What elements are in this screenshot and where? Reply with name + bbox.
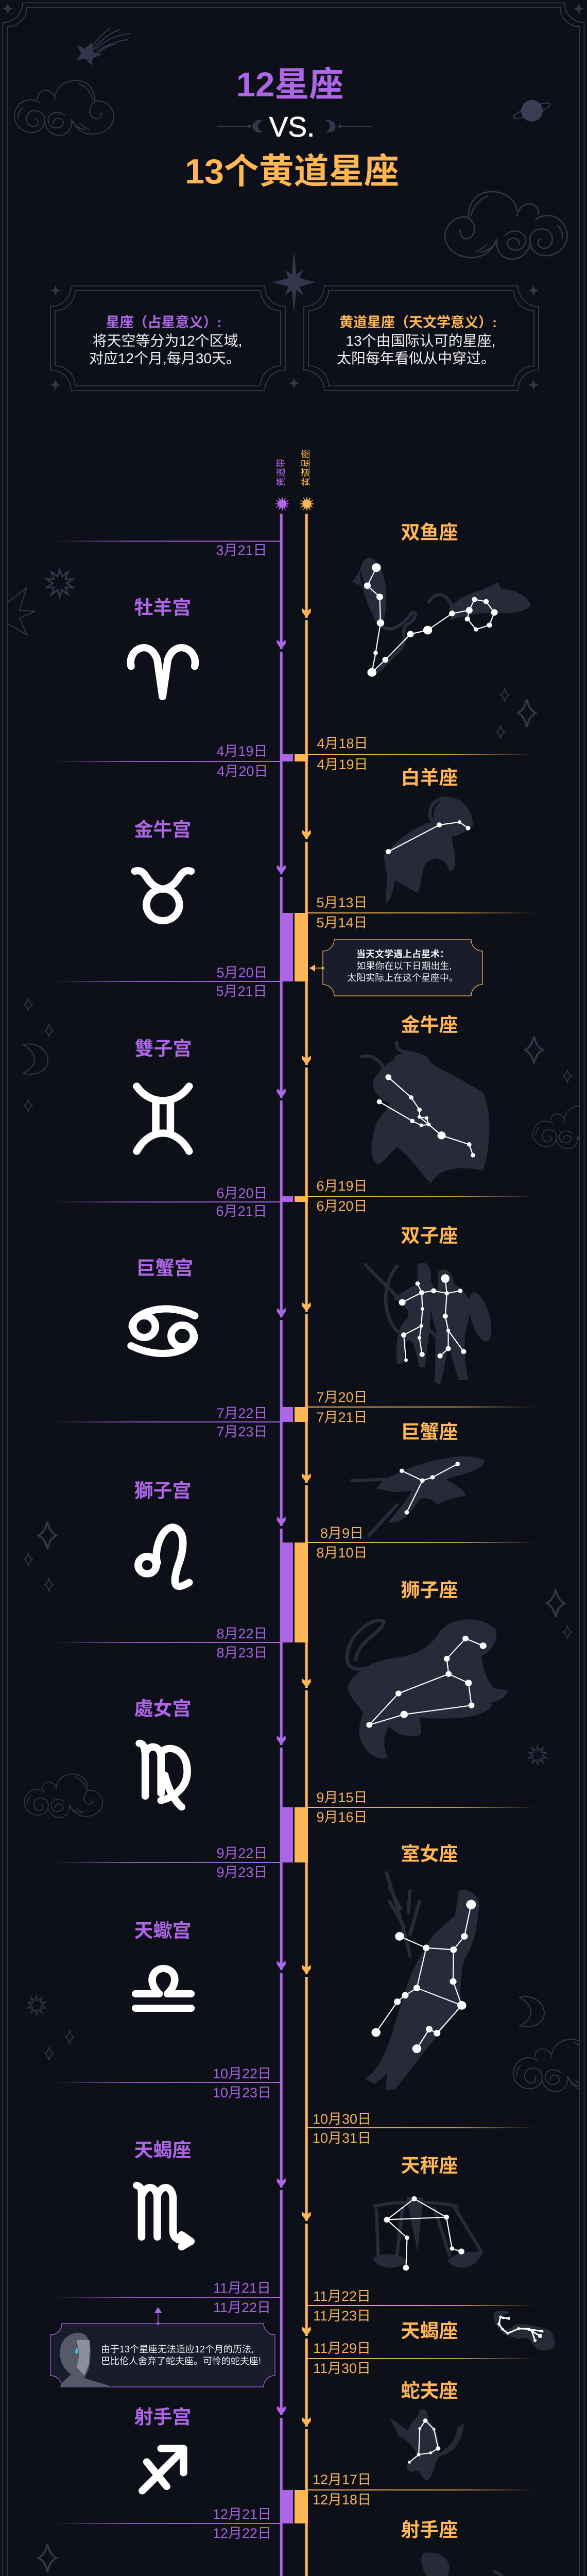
- zodiac sign dates: 12月22日: [213, 2526, 271, 2541]
- sign: leo: [134, 1480, 192, 1586]
- sign: virgo: 處女宫: [134, 1698, 192, 1719]
- constellation: Pisces top: [352, 522, 531, 677]
- zodiac sign dates: 3月21日: [216, 543, 267, 558]
- zodiac sign dates: 9月22日: [216, 1845, 268, 1861]
- title: 12星座: [236, 65, 343, 104]
- sign: scorpio: 天蝎座: [134, 2140, 192, 2161]
- sign: taurus: 金牛宫: [134, 819, 192, 840]
- callout: Babylonians dropped Ophiuchus: [50, 2307, 275, 2387]
- zodiac sign dates: 8月23日: [216, 1645, 268, 1660]
- constellation: Libra: [373, 2155, 483, 2270]
- zodiac sign dates: 4月20日: [217, 764, 268, 779]
- sign: sagittarius: 射手宫: [134, 2406, 192, 2428]
- panel: zodiac constellation definition: 太阳每年看似从中穿过。: [337, 350, 495, 366]
- sign: scorpio: [134, 2140, 192, 2247]
- zodiac sign dates: 7月23日: [216, 1424, 268, 1439]
- constellation: Aries: [384, 767, 473, 904]
- constellation: Scorpius: [401, 2311, 555, 2350]
- zodiac constellation dates: 6月20日: [316, 1198, 368, 1214]
- zodiac sign dates: [213, 543, 271, 2576]
- zodiac constellation dates: 12月17日: [313, 2472, 371, 2487]
- sign: leo: 獅子宫: [134, 1480, 192, 1501]
- zodiac constellation dates: 11月30日: [313, 2361, 371, 2376]
- constellation: Sagittarius: [335, 2519, 513, 2576]
- timeline: zodiac constellations axis: 黄道星座: [301, 449, 311, 486]
- constellation: Sagittarius: 射手座: [401, 2519, 458, 2540]
- icon: crying old man: [60, 2333, 112, 2387]
- sign: libra: [134, 1920, 192, 2008]
- timeline: zodiac constellations axis: [295, 449, 315, 2576]
- panel: zodiac constellation definition: 13个由国际认可的星座,: [346, 333, 495, 349]
- zodiac constellation dates: 8月10日: [316, 1545, 368, 1561]
- timeline: zodiac signs axis: 黄道带: [276, 459, 286, 486]
- zodiac sign dates: 6月21日: [216, 1204, 267, 1219]
- constellation: Gemini: [365, 1225, 496, 1385]
- zodiac constellation dates: 8月9日: [320, 1526, 364, 1541]
- zodiac constellation dates: 5月14日: [316, 915, 368, 930]
- constellation: Taurus: [361, 1014, 490, 1183]
- constellation: Scorpius: 天蝎座: [401, 2320, 458, 2342]
- sign: cancer: [131, 1258, 195, 1353]
- sign: libra: 天蠍宫: [134, 1920, 192, 1941]
- orange divider lines: [307, 754, 536, 2576]
- sign: gemini: 雙子宫: [135, 1038, 192, 1059]
- zodiac sign dates: 4月19日: [216, 743, 268, 759]
- constellation: Aries: 白羊座: [401, 767, 458, 788]
- title: 13个黄道星座: [185, 152, 399, 191]
- callout: astronomy meets astrology: 太阳实际上在这个星座中。: [347, 973, 458, 983]
- zodiac constellation dates: 5月13日: [316, 895, 368, 910]
- constellation: Ophiuchus: 蛇夫座: [401, 2380, 458, 2401]
- constellation: Cancer: 巨蟹座: [401, 1421, 458, 1443]
- zodiac sign dates: 10月22日: [213, 2066, 271, 2081]
- zodiac constellation dates: 9月15日: [316, 1790, 368, 1805]
- zodiac constellation dates: 10月31日: [313, 2130, 371, 2146]
- zodiac sign dates: 9月23日: [216, 1865, 268, 1880]
- sign: sagittarius: [134, 2406, 192, 2491]
- zodiac sign dates: 7月22日: [216, 1405, 268, 1421]
- zodiac sign dates: 11月21日: [213, 2280, 271, 2296]
- callout: astronomy meets astrology: 如果你在以下日期出生,: [356, 961, 452, 971]
- sign: gemini: [135, 1038, 192, 1151]
- zodiac constellation dates: 11月23日: [313, 2308, 371, 2324]
- zodiac sign dates: 12月21日: [213, 2506, 271, 2522]
- zodiac constellation dates: 11月29日: [313, 2341, 371, 2356]
- callout: astronomy meets astrology: 当天文学遇上占星术：: [356, 948, 449, 959]
- constellation: Taurus: 金牛座: [401, 1014, 458, 1036]
- zodiac sign dates: 11月22日: [213, 2300, 271, 2315]
- constellation: Leo: [347, 1580, 507, 1758]
- zodiac constellation dates: 10月30日: [313, 2111, 371, 2127]
- constellation: Leo: 狮子座: [401, 1580, 458, 1601]
- constellation: Libra: 天秤座: [401, 2155, 458, 2176]
- constellation: Ophiuchus: [389, 2380, 463, 2481]
- callout: astronomy meets astrology: [309, 940, 482, 996]
- zodiac constellation dates: 12月18日: [313, 2492, 371, 2507]
- timeline: zodiac signs axis: [274, 459, 293, 2576]
- divider lines: [53, 541, 281, 2576]
- constellation: Virgo: [365, 1843, 479, 2090]
- zodiac sign dates: 5月20日: [216, 965, 268, 980]
- panel: zodiac sign definition: 将天空等分为12个区域,: [93, 333, 242, 349]
- zodiac sign dates: 8月22日: [216, 1626, 268, 1641]
- panel: zodiac constellation definition: [304, 286, 539, 391]
- zodiac sign dates: 6月20日: [216, 1185, 268, 1201]
- zodiac constellation dates: 4月18日: [317, 736, 368, 751]
- constellation: Gemini: 双子座: [401, 1225, 458, 1246]
- zodiac constellation dates: 6月19日: [316, 1178, 368, 1194]
- callout: Babylonians dropped Ophiuchus: 巴比伦人舍弃了蛇夫座。可怜的蛇夫座!: [101, 2356, 261, 2366]
- panel: zodiac sign definition: [50, 286, 285, 391]
- sign: virgo: [134, 1698, 192, 1807]
- zodiac constellation dates: 9月16日: [316, 1809, 368, 1825]
- panel: zodiac sign definition: 星座（占星意义）:: [106, 315, 221, 330]
- sign: aries: 牡羊宫: [134, 597, 192, 618]
- star ornament between definition panels: [50, 253, 539, 390]
- zodiac constellation dates: [313, 736, 371, 2576]
- constellation: Cancer: [352, 1421, 485, 1535]
- title: VS.: [269, 111, 315, 143]
- zodiac constellation dates: 7月20日: [316, 1389, 368, 1405]
- sign: cancer: 巨蟹宫: [136, 1258, 194, 1279]
- zodiac constellation dates: 7月21日: [316, 1410, 368, 1425]
- constellation: Pisces top: 双鱼座: [401, 522, 458, 543]
- sign: aries: [131, 597, 195, 697]
- panel: zodiac sign definition: 对应12个月,每月30天。: [89, 350, 240, 366]
- zodiac sign dates: 10月23日: [213, 2085, 271, 2100]
- title: [185, 65, 399, 191]
- zodiac sign dates: 5月21日: [216, 984, 267, 999]
- constellation: Virgo: 室女座: [401, 1843, 458, 1865]
- panel: zodiac constellation definition: 黄道星座（天文学意义）:: [339, 315, 497, 330]
- callout: Babylonians dropped Ophiuchus: 由于13个星座无法适应12个月的历法,: [101, 2344, 254, 2354]
- zodiac constellation dates: 4月19日: [317, 757, 368, 772]
- sign: taurus: [134, 819, 192, 921]
- zodiac constellation dates: 11月22日: [313, 2289, 371, 2304]
